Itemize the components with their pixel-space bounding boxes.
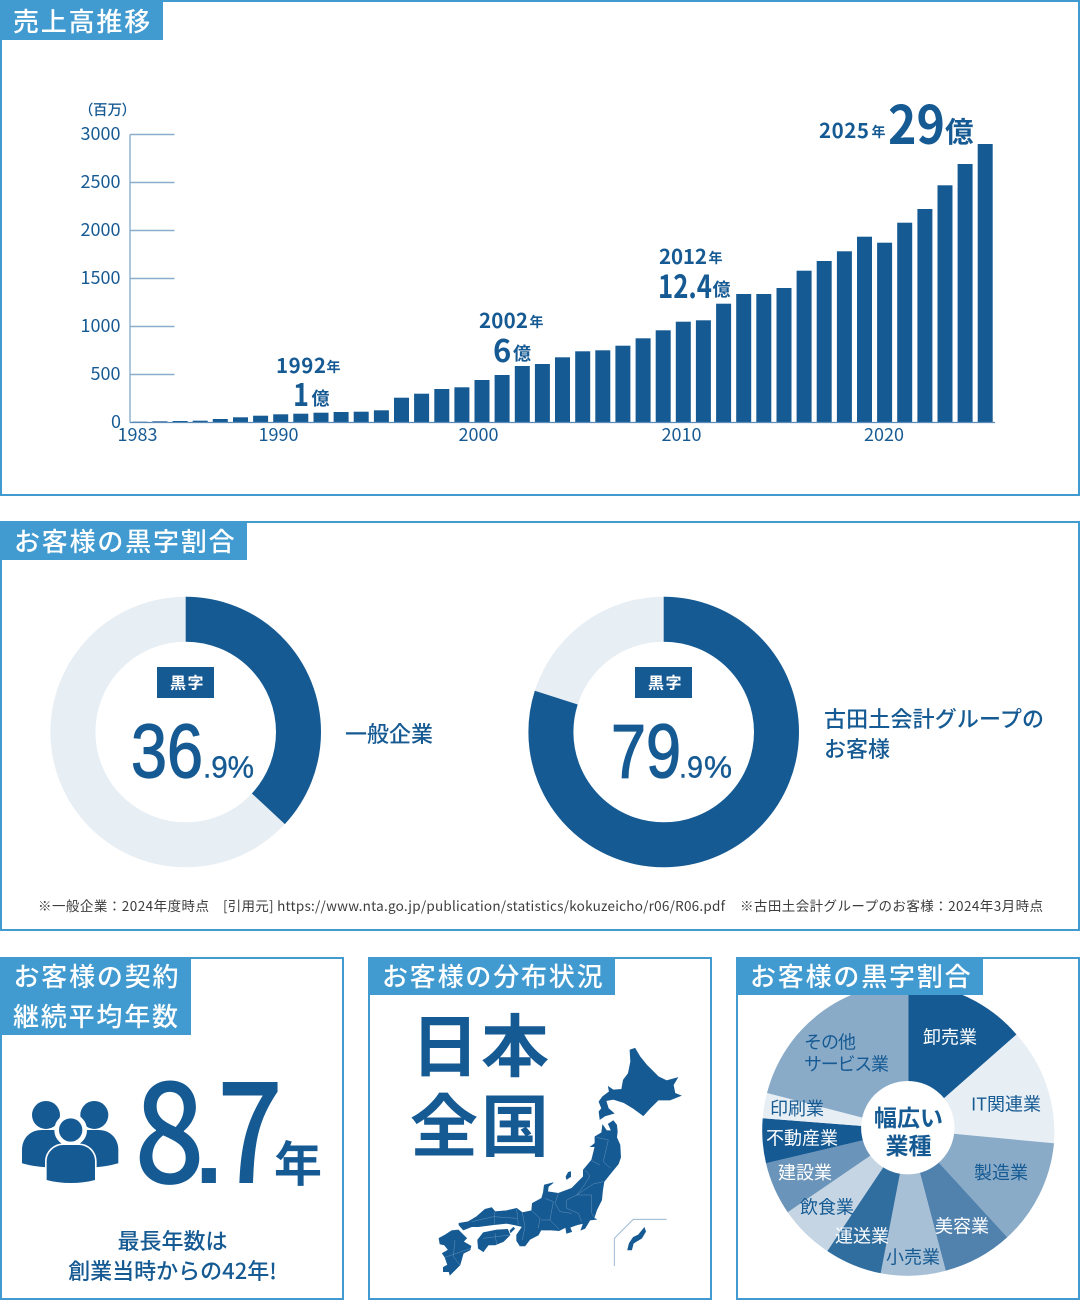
value bbox=[131, 710, 254, 794]
value: 79 bbox=[611, 710, 681, 794]
pie labels: 不動産業 bbox=[766, 1124, 838, 1150]
Hokkaido bbox=[599, 1048, 681, 1119]
y axis labels: 2500 bbox=[81, 168, 121, 194]
x axis labels: 2000 bbox=[459, 421, 498, 447]
value: % bbox=[704, 750, 732, 784]
label: clients: お客様 bbox=[824, 732, 890, 764]
callout: 2012: 12.4 bbox=[658, 262, 712, 308]
callout: 2002: 億 bbox=[513, 340, 531, 366]
x axis labels: 1983 bbox=[118, 421, 157, 447]
prefecture borders bbox=[445, 1137, 611, 1265]
Awaji bbox=[510, 1227, 515, 1233]
inset: Okinawa bbox=[614, 1219, 667, 1266]
callout: 2012: 億 bbox=[712, 276, 730, 302]
y axis labels: 1500 bbox=[81, 264, 121, 290]
value bbox=[611, 710, 732, 794]
pie labels: 印刷業 bbox=[770, 1095, 824, 1121]
footnote bbox=[38, 895, 1043, 915]
pie labels: 製造業 bbox=[974, 1159, 1028, 1185]
callout: 1992: 億 bbox=[312, 385, 330, 411]
chart axes bbox=[130, 134, 174, 422]
badge: 黒字 bbox=[648, 670, 683, 694]
center circle: 業種 bbox=[886, 1127, 932, 1161]
callout: 2025 bbox=[819, 84, 974, 160]
x axis labels bbox=[118, 421, 904, 447]
value: 8.7 years bbox=[134, 1025, 322, 1223]
y axis labels bbox=[81, 99, 129, 434]
x axis labels: 2020 bbox=[864, 421, 904, 447]
badge: 黒字 bbox=[170, 670, 205, 694]
pie labels: 卸売業 bbox=[923, 1024, 977, 1050]
callout: 2002: 2002 bbox=[479, 304, 528, 334]
y axis labels: 2000 bbox=[81, 216, 121, 242]
callout: 2012: 年 bbox=[708, 248, 722, 268]
center circle bbox=[861, 1081, 954, 1174]
x axis labels: 1990 bbox=[259, 421, 298, 447]
map: Japan bbox=[439, 1048, 681, 1275]
y axis labels: 500 bbox=[91, 360, 120, 386]
note: longest contract bbox=[68, 1224, 277, 1286]
callout: 1992: 年 bbox=[326, 357, 340, 377]
value: 8.7 years: . bbox=[195, 1093, 223, 1205]
pie labels: 美容業 bbox=[935, 1212, 989, 1238]
note: longest contract: 最長年数は bbox=[117, 1224, 228, 1256]
value: 36 bbox=[131, 710, 203, 794]
value: 8.7 years: 7 bbox=[217, 1025, 283, 1223]
label: general companies: 一般企業 bbox=[345, 717, 433, 749]
pie labels: 飲食業 bbox=[800, 1194, 854, 1220]
bar chart: sales bbox=[81, 84, 995, 447]
Sado bbox=[566, 1172, 571, 1179]
pie chart: industries bbox=[762, 983, 1054, 1276]
panel: contract years bbox=[0, 957, 343, 1299]
pie labels: 小売業 bbox=[886, 1244, 940, 1270]
pie labels: IT関連業 bbox=[971, 1090, 1041, 1116]
donut: clients bbox=[551, 619, 777, 845]
label: clients bbox=[824, 702, 1044, 764]
value: .9% bbox=[203, 750, 254, 784]
panel: industries bbox=[736, 957, 1079, 1299]
y axis labels: 0 bbox=[111, 408, 121, 434]
heading: contract years: お客様の契約 bbox=[14, 957, 180, 994]
x axis labels: 2010 bbox=[662, 421, 701, 447]
icon: people bbox=[22, 1101, 118, 1183]
pie labels: 建設業 bbox=[778, 1159, 832, 1185]
callout: 2025: 億 bbox=[945, 110, 974, 151]
y axis labels: 3000 bbox=[81, 120, 121, 146]
callout: 2012: 2012 bbox=[659, 240, 707, 270]
callout: 2025: 29 bbox=[888, 84, 945, 160]
Shikoku bbox=[478, 1229, 510, 1252]
y axis labels: 1000 bbox=[81, 312, 121, 338]
callout: 1992: 1 bbox=[293, 370, 309, 415]
callout: 1992: 1992 bbox=[276, 349, 326, 379]
pie labels bbox=[766, 1024, 1041, 1270]
heading: industries: お客様の黒字割合 bbox=[750, 957, 972, 994]
footnote: ※古田土会計グループのお客様：2024年3月時点 bbox=[740, 895, 1043, 915]
panel: sales trend bbox=[0, 0, 1079, 495]
big text: nationwide: 全国 bbox=[410, 1072, 552, 1171]
footnote: [引用元] https://www.nta.go.jp/publication/statistics/kokuzeicho/r06/R06.pdf bbox=[223, 895, 726, 915]
footnote: ※一般企業：2024年度時点 bbox=[38, 895, 209, 915]
pie labels: 運送業 bbox=[835, 1222, 889, 1248]
callout: 2025: 年 bbox=[872, 122, 886, 142]
Kyushu bbox=[439, 1230, 471, 1275]
heading: contract years: 継続平均年数 bbox=[13, 997, 180, 1034]
badge bbox=[635, 667, 692, 698]
callout: 2012 bbox=[658, 240, 730, 308]
callout: 2002: 6 bbox=[493, 326, 511, 371]
note: longest contract: 創業当時からの42年! bbox=[68, 1254, 277, 1286]
heading: profit ratio: お客様の黒字割合 bbox=[14, 522, 236, 559]
value: 8.7 years: 8 bbox=[134, 1025, 205, 1223]
callout: 1992 bbox=[276, 349, 340, 415]
value: 8.7 years: 年 bbox=[274, 1125, 322, 1195]
big text: nationwide: 日本 bbox=[411, 992, 551, 1091]
heading: contract years bbox=[0, 957, 191, 1035]
pie labels: サービス業 bbox=[804, 1050, 889, 1076]
big text: nationwide bbox=[410, 992, 552, 1171]
callout: 2002: 年 bbox=[530, 312, 544, 332]
Honshu bbox=[459, 1121, 621, 1246]
label: clients: 古田土会計グループの bbox=[824, 702, 1044, 734]
badge bbox=[157, 667, 214, 698]
heading: distribution: お客様の分布状況 bbox=[382, 957, 604, 994]
bars 1983-2025 bbox=[132, 144, 993, 422]
center circle: 幅広い bbox=[874, 1099, 943, 1133]
panel: distribution bbox=[368, 957, 711, 1299]
value: .9 bbox=[679, 750, 703, 784]
pie labels: その他 bbox=[804, 1028, 856, 1054]
callout: 2002 bbox=[479, 304, 544, 371]
panel: profit ratio bbox=[0, 521, 1079, 930]
main islands bbox=[439, 1121, 621, 1275]
heading: sales trend: 売上高推移 bbox=[13, 2, 152, 39]
y axis labels: （百万） bbox=[86, 99, 129, 120]
callout: 2025: 2025 bbox=[819, 114, 869, 144]
donut: general companies bbox=[73, 619, 299, 845]
